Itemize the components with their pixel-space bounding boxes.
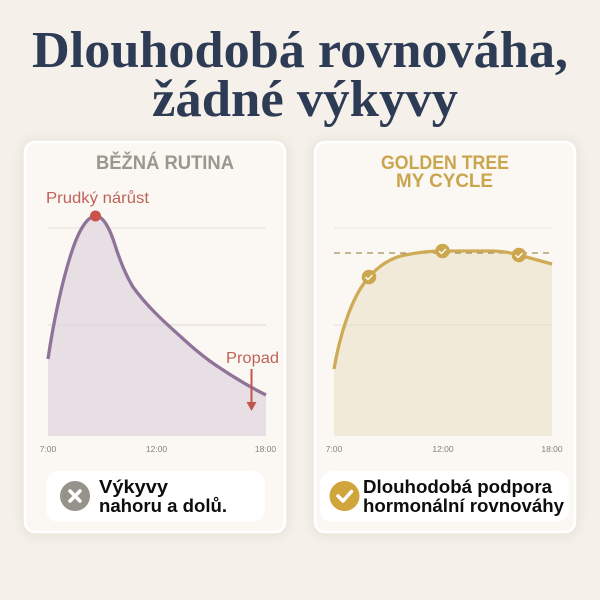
peak marker — [90, 210, 101, 222]
title: Dlouhodobá rovnováha, — [32, 22, 568, 79]
axis labels: 12:00 — [432, 444, 454, 454]
callout text: Dlouhodobá podpora — [363, 477, 553, 497]
label: prudký nárůst: Prudký nárůst — [46, 189, 150, 207]
icon: cross — [60, 481, 90, 511]
callout text: nahoru a dolů. — [99, 496, 227, 516]
arrow: down — [246, 369, 256, 411]
line chart: golden tree — [326, 228, 563, 454]
callout text — [363, 477, 564, 516]
title: žádné výkyvy — [152, 71, 458, 128]
axis labels: 18:00 — [541, 444, 563, 454]
callout: dlouhodobá podpora — [320, 471, 569, 522]
curve: gold line — [334, 251, 552, 369]
heading: běžná rutina: BĚŽNÁ RUTINA — [96, 152, 234, 174]
panel: golden tree my cycle — [312, 140, 578, 536]
label: propad: Propad — [226, 350, 279, 367]
heading: golden tree my cycle: MY CYCLE — [396, 171, 493, 192]
heading: golden tree my cycle — [381, 153, 509, 192]
target dashed line — [334, 252, 554, 254]
axis labels: 18:00 — [255, 444, 276, 454]
axis labels — [326, 444, 563, 454]
callout text: Výkyvy — [99, 477, 168, 497]
check markers — [362, 244, 526, 284]
heading: golden tree my cycle: GOLDEN TREE — [381, 153, 509, 174]
title — [32, 22, 568, 128]
line chart: běžná rutina — [40, 189, 279, 454]
axis labels: 7:00 — [40, 444, 57, 454]
axis labels: 7:00 — [326, 444, 343, 454]
axis labels — [40, 444, 276, 454]
icon: check — [330, 481, 360, 511]
callout text — [99, 477, 227, 516]
callout: výkyvy — [46, 471, 265, 522]
curve: purple line — [48, 216, 266, 395]
callout text: hormonální rovnováhy — [363, 496, 564, 516]
panel: běžná rutina — [22, 140, 288, 536]
axis labels: 12:00 — [146, 444, 167, 454]
